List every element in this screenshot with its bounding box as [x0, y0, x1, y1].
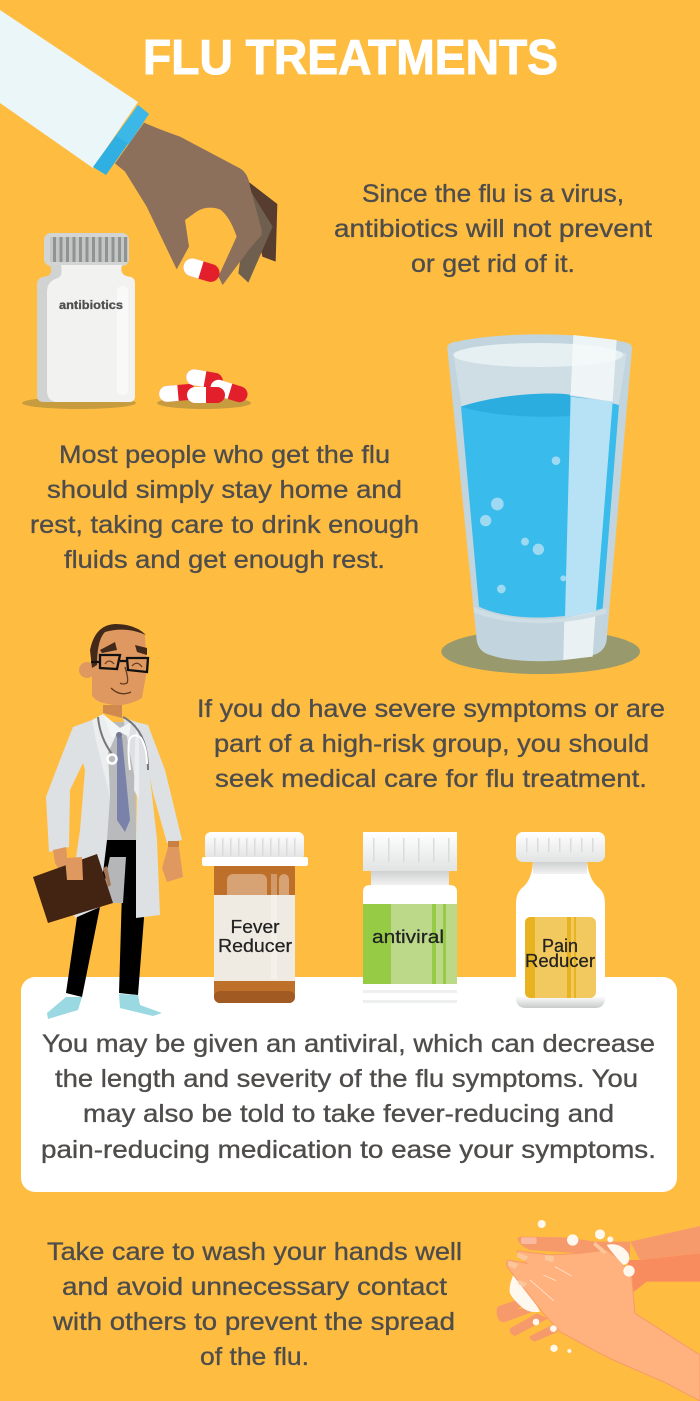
text: wash hands: of the flu. [200, 1343, 309, 1371]
icon: washing hands [497, 1220, 700, 1401]
panel: antiviral advice: may also be told to take fever-reducing and [83, 1100, 614, 1128]
icon: doctor [33, 624, 183, 1019]
title: FLU TREATMENTS [143, 31, 558, 85]
glasses [91, 655, 148, 672]
text: antibiotics note: or get rid of it. [411, 250, 575, 278]
text: seek medical care: seek medical care for flu treatment. [215, 765, 647, 793]
icon: antibiotics bottle [22, 233, 136, 409]
left wrist [53, 847, 67, 880]
icon: pain reducer bottle: Pain [542, 936, 578, 956]
ear [79, 662, 95, 678]
icon: antiviral bottle [363, 832, 457, 1003]
socks [47, 997, 82, 1019]
text: antibiotics note: Since the flu is a virus, [362, 180, 624, 208]
panel: antiviral advice [21, 977, 677, 1192]
clipboard [33, 854, 113, 923]
icon: pain reducer bottle: Reducer [525, 951, 595, 971]
fingers [65, 857, 83, 880]
icon: fever reducer bottle: Fever [230, 917, 280, 937]
legs and trousers [66, 840, 144, 997]
panel: antiviral advice: pain-reducing medication to ease your symptoms. [41, 1136, 656, 1164]
neck [103, 705, 122, 718]
coat right panel and arm [123, 717, 182, 918]
text: seek medical care: If you do have severe symptoms or are [197, 695, 665, 723]
text: seek medical care: part of a high-risk group, you should [214, 730, 649, 758]
text: wash hands: and avoid unnecessary contact [62, 1273, 447, 1301]
text: rest and fluids: rest, taking care to drink enough [30, 511, 419, 539]
icon: fever reducer bottle [202, 832, 308, 1003]
coat left panel and arm [46, 716, 110, 918]
icon: fever reducer bottle: Reducer [218, 936, 292, 956]
lapels [92, 714, 117, 797]
collar [103, 714, 131, 738]
right hand [162, 847, 183, 882]
text: wash hands: Take care to wash your hands well [47, 1238, 462, 1266]
icon: pain reducer bottle [516, 832, 605, 1008]
eyes and nose [105, 661, 142, 694]
text: rest and fluids: Most people who get the flu [59, 441, 390, 469]
text: antibiotics note: antibiotics will not prevent [334, 215, 652, 243]
panel: antiviral advice: You may be given an antiviral, which can decrease [42, 1030, 655, 1058]
icon: doctor hand holding pill [0, 10, 277, 285]
icon: pile of capsules [157, 368, 251, 409]
head [92, 626, 147, 705]
stethoscope [98, 717, 148, 770]
hair [90, 624, 146, 668]
text: rest and fluids: fluids and get enough rest. [64, 546, 385, 574]
icon: antibiotics bottle: antibiotics [59, 298, 123, 312]
text: rest and fluids [30, 441, 419, 574]
text: seek medical care [197, 695, 665, 793]
icon: antiviral bottle: antiviral [372, 927, 444, 947]
text: rest and fluids: should simply stay home and [47, 476, 402, 504]
icon: glass of water [441, 334, 640, 674]
panel: antiviral advice: the length and severity of the flu symptoms. You [55, 1065, 638, 1093]
text: antibiotics note [334, 180, 652, 278]
text: wash hands: with others to prevent the spread [52, 1308, 455, 1336]
text: wash hands [47, 1238, 462, 1371]
tie [117, 737, 130, 832]
shirt [100, 722, 136, 840]
